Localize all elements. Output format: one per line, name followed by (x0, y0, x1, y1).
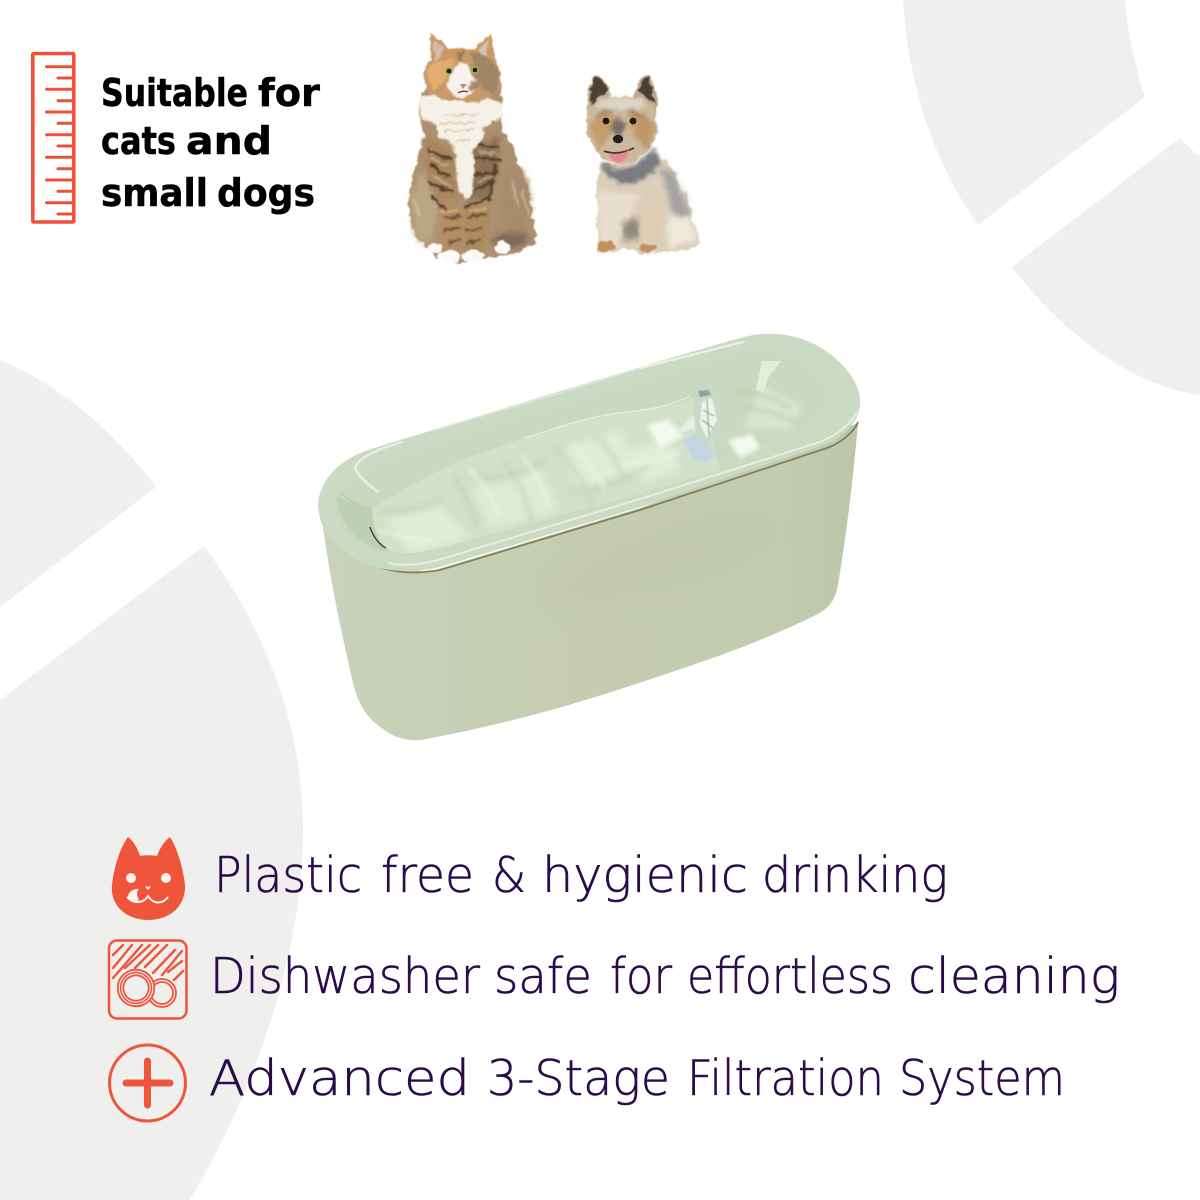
feature text: dishwasher safe: effortless (687, 948, 893, 1005)
feature text: dishwasher safe: for (610, 948, 673, 1005)
background shape: top right upper (903, 0, 1145, 225)
cat face tongue (128, 889, 139, 901)
cat stripes (414, 145, 528, 243)
feature text: plastic free: free (381, 847, 474, 904)
water crest edge (523, 396, 690, 438)
cat upper arms (424, 135, 500, 200)
fountain dark pump slot (370, 527, 386, 548)
feature text: dishwasher safe (210, 948, 1120, 1005)
icon: dishwasher plates (109, 940, 186, 1018)
dog ears (586, 74, 658, 122)
feature text: filtration: System (899, 1050, 1065, 1107)
feature text: filtration (209, 1050, 1065, 1107)
cat front legs (437, 200, 492, 252)
icon: ruler (33, 54, 74, 222)
cat face eyes (126, 873, 136, 883)
feature text: filtration: Advanced (209, 1050, 470, 1107)
feature text: filtration: 3-Stage (487, 1050, 670, 1107)
feature text: filtration: Filtration (687, 1050, 884, 1107)
fountain water jet (672, 390, 722, 445)
dog collar fur (601, 148, 660, 184)
dog paws (597, 241, 657, 252)
feature text: plastic free: hygienic (542, 847, 748, 904)
feature text: plastic free: drinking (762, 847, 948, 904)
feature text: dishwasher safe: safe (494, 948, 592, 1005)
fountain body (323, 423, 858, 740)
dog rear leg (668, 215, 696, 248)
dog eyes nose tongue (603, 118, 636, 163)
cat face nose (145, 886, 151, 890)
cat ruff and bib (420, 96, 503, 200)
cat haunches (412, 165, 530, 248)
fountain rim front highlight (388, 412, 857, 565)
product: ceramic water fountain (318, 334, 860, 740)
fountain left rim seam (340, 493, 364, 510)
fountain body shading (524, 484, 796, 636)
fountain rim (318, 334, 860, 571)
heading: suitable for cats and small dogs: Suitable (101, 71, 248, 115)
heading: suitable for cats and small dogs: cats (101, 119, 176, 163)
dog head (587, 96, 657, 164)
background shape: left upper (0, 360, 156, 607)
feature text: plastic free: Plastic (214, 847, 362, 904)
basin highlight strokes (355, 342, 743, 492)
water splash streak (756, 361, 781, 392)
icon: plus in circle (110, 1045, 186, 1121)
feature text: plastic free (214, 847, 948, 904)
dog back shading (660, 165, 690, 222)
cat head (424, 33, 501, 102)
feature text: dishwasher safe: cleaning (908, 948, 1120, 1005)
bright water patches (647, 420, 760, 458)
feature text: dishwasher safe: Dishwasher (210, 948, 481, 1005)
background shape: top right lower (1012, 138, 1200, 395)
ripples right of jet (738, 385, 802, 430)
fountain basin (333, 351, 829, 555)
dog body (596, 160, 702, 254)
water surface (372, 398, 718, 553)
illustration: cat (409, 33, 536, 263)
heading: suitable for cats and small dogs: for (258, 71, 320, 115)
dog front fur (598, 190, 665, 252)
water ripples (385, 430, 680, 555)
illustration: dog (586, 74, 702, 254)
fountain rim shadow line (372, 422, 858, 572)
cat face mouth (127, 896, 168, 903)
heading: suitable for cats and small dogs: and (186, 119, 272, 163)
cat eyes and nose (445, 66, 479, 93)
cat paws (428, 242, 511, 262)
feature text: plastic free: & (492, 847, 526, 904)
cat bib folds (440, 114, 478, 140)
cat head markings (426, 39, 499, 97)
heading: suitable for cats and small dogs (101, 71, 320, 215)
dog face markings (589, 97, 656, 150)
heading: suitable for cats and small dogs: dogs (217, 171, 315, 215)
icon: cat face (112, 837, 185, 920)
dog belly shadow (622, 218, 642, 240)
background shape: left lower (0, 546, 303, 1200)
fountain outlet blue base (683, 434, 718, 462)
heading: suitable for cats and small dogs: small (101, 171, 208, 215)
cat silhouette (409, 33, 536, 263)
basin left wall (336, 497, 386, 552)
